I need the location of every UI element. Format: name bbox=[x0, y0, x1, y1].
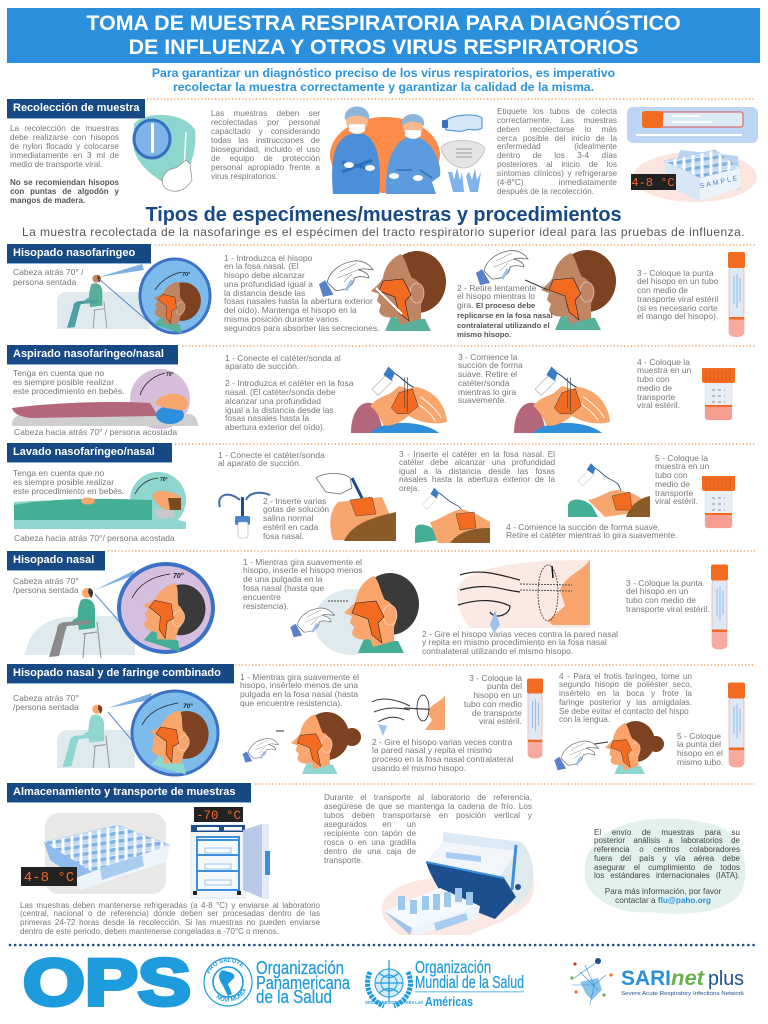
step 1: hisopo, inserte el hisopo menos bbox=[243, 565, 363, 575]
illustration: seated patient, nasal swab bbox=[25, 564, 213, 658]
subtitle: Para garantizar un diagnóstico preciso de los virus respiratorios, es imperativo bbox=[152, 66, 615, 80]
text: labelling tubes: Etiquete los tubos de colecta bbox=[497, 107, 617, 116]
illustration: throat swab bbox=[554, 721, 664, 774]
text: refrigeration: (central, nacional o de referencia) donde deben ser procesadas dentro de las bbox=[20, 909, 320, 918]
step 3: nasales hasta la abertura exterior de la bbox=[399, 475, 555, 484]
text: swab guidance: inmediatamente en 3 ml de bbox=[10, 150, 119, 160]
step 3: de transporte bbox=[472, 708, 522, 718]
step 5: medio de bbox=[655, 479, 690, 489]
text: labelling tubes: deben recolectarse lo más bbox=[497, 125, 617, 134]
illustration: refrigerated vials rack bbox=[21, 813, 170, 894]
step 3: del hisopo en un tubo bbox=[637, 276, 718, 286]
text: refrigeration: dentro de este periodo, deben mantenerse congeladas a -70°C o menos. bbox=[20, 927, 279, 936]
dotted dividers bbox=[108, 99, 755, 784]
step 1: 1 - Introduzca el hisopo bbox=[224, 252, 312, 262]
step 5: 5 - Coloque bbox=[677, 730, 721, 740]
note: infants: es siempre posible realizar bbox=[13, 376, 114, 386]
caption: position: Cabeza atrás 70° bbox=[13, 576, 79, 586]
step 2: usando el mismo hisopo. bbox=[372, 763, 466, 773]
caption: position: /persona sentada bbox=[13, 584, 79, 594]
illustration: cooler box with vials bbox=[382, 832, 534, 935]
step 2: estéril en cada bbox=[263, 522, 318, 532]
caption: position: /persona sentada bbox=[13, 702, 79, 712]
icon: sample box with temperature display: 4-8 °C bbox=[631, 176, 675, 190]
illustration: supine patient, wash bbox=[14, 472, 186, 529]
caption: position: Cabeza atrás 70° / bbox=[13, 267, 84, 277]
heading: storage and transport: Almacenamiento y transporte de muestras bbox=[13, 786, 236, 798]
step 5 bbox=[677, 730, 723, 767]
icon: viral transport tube bbox=[728, 252, 745, 337]
text: labelling tubes: cerca posible del inicio de la bbox=[497, 134, 617, 143]
heading: Lavado: Lavado nasofaríngeo/nasal bbox=[13, 446, 155, 458]
text: cold chain: transporte. bbox=[324, 856, 363, 865]
icon: specimen cup bbox=[702, 368, 735, 420]
step 4: segundo hisopo de poliéster seco, bbox=[559, 680, 692, 689]
step 2: el hisopo mientras lo bbox=[457, 291, 535, 301]
text: refrigeration: Las muestras deben mantenerse refrigeradas (a 4-8 °C) y enviarse al laboratorio bbox=[20, 900, 320, 910]
step 1: encuentre bbox=[243, 592, 281, 602]
step 2 bbox=[372, 736, 513, 773]
logo text: Organización Mundial de la Salud: Américas bbox=[425, 994, 473, 1009]
icon: labelled tube card bbox=[627, 107, 758, 143]
logo text: Organización Mundial de la Salud: Mundial de la Salud bbox=[415, 972, 524, 992]
subtitle bbox=[152, 66, 615, 94]
step 3: succión de forma bbox=[458, 360, 523, 370]
step 3: hisopo en un bbox=[473, 690, 522, 700]
note: infants bbox=[13, 368, 125, 396]
logo: WHO emblem bbox=[368, 960, 410, 1006]
text: trained personnel: todas las instrucciones de bbox=[211, 136, 320, 145]
callout: international shipment: El envío de muestras para su bbox=[594, 828, 740, 836]
step 5: viral estéril. bbox=[655, 496, 698, 506]
step 3: catéter/sonda bbox=[458, 378, 510, 388]
logo text: SARInet plus: net bbox=[671, 967, 705, 990]
step 3: mientras lo gira bbox=[458, 387, 516, 397]
icon: health workers with protective equipment bbox=[330, 106, 485, 194]
heading: Aspirado: Aspirado nasofaríngeo/nasal bbox=[13, 348, 164, 360]
step 3: transporte viral estéril. bbox=[626, 604, 710, 614]
logo text: Organización Mundial de la Salud: OFICINA REGIONAL PARA LAS bbox=[365, 1000, 423, 1005]
logo text: Organización Mundial de la Salud: Organización bbox=[415, 957, 491, 977]
illustration: refrigerated vials rack: 4-8 °C bbox=[24, 870, 74, 886]
text: swab guidance: debe realizarse con hisopos bbox=[10, 132, 119, 142]
step 4: faringe posterior y las amígdalas. bbox=[559, 698, 692, 707]
step 4: muestra en un bbox=[637, 365, 691, 375]
note: infants: este procedimiento en bebés. bbox=[13, 486, 125, 496]
step 3: 3 - Coloque la punta bbox=[626, 578, 703, 588]
logo: SARInet network graphic bbox=[570, 958, 613, 1005]
caption: position bbox=[13, 576, 79, 594]
note: infants: Tenga en cuenta que no bbox=[13, 468, 104, 478]
step 3: oreja. bbox=[399, 484, 419, 493]
illustration: supine patient, wash: 70° bbox=[160, 477, 168, 483]
illustration: rotating swab small bbox=[372, 695, 445, 736]
step 2: contralateral utilizando el bbox=[457, 321, 550, 330]
step 1: pulgada en la fosa nasal (hasta bbox=[240, 689, 358, 699]
heading: Recolección de muestra bbox=[7, 99, 145, 119]
step 2: y repita en mismo procedimiento en la fosa nasal bbox=[422, 637, 607, 647]
text: labelling tubes: después de la recolección. bbox=[497, 187, 594, 196]
logo text: SARInet plus: SARI bbox=[621, 967, 671, 990]
text: cold chain: recipiente con tapón de bbox=[324, 829, 416, 838]
step 5: 5 - Coloque la bbox=[655, 452, 708, 462]
step 3: transporte viral estéril bbox=[637, 294, 718, 304]
title banner bbox=[7, 8, 760, 63]
step 3: suave. Retire el bbox=[458, 369, 517, 379]
text: swab guidance: La recolección de muestras bbox=[10, 124, 119, 132]
title: DE INFLUENZA Y OTROS VIRUS RESPIRATORIOS bbox=[129, 35, 638, 59]
callout background blob bbox=[585, 819, 745, 914]
caption: position bbox=[13, 692, 79, 712]
text: swab guidance: con puntas de algodón y bbox=[10, 186, 119, 196]
illustration: nasal swab, profile bbox=[290, 573, 419, 655]
heading: Hisopado nasal bbox=[7, 551, 105, 571]
heading: Lavado bbox=[7, 443, 172, 463]
illustration: seated patient, nasopharyngeal swab: 70° bbox=[182, 272, 190, 278]
step 4: con la lengua. bbox=[559, 715, 610, 724]
step 1: 1 - Mientras gira suavemente el bbox=[243, 556, 362, 566]
step 4: 4 - Coloque la bbox=[637, 356, 690, 366]
icon: sample box with temperature display: SAMPLE bbox=[699, 175, 740, 190]
text: trained personnel: recolectadas por personal bbox=[211, 118, 320, 127]
text: cold chain bbox=[324, 793, 532, 865]
logo: PAHO emblem: PRO SALUTE bbox=[206, 958, 244, 974]
callout: international shipment: posterior análisis a laboratorios de bbox=[594, 836, 740, 845]
note: infants bbox=[13, 468, 125, 496]
text: labelling tubes: dentro de los 3-4 días bbox=[497, 151, 617, 160]
text: trained personnel: capacitado y considerando bbox=[211, 127, 320, 136]
step 3: tubo con medio de bbox=[626, 595, 696, 605]
text: swab guidance: mangos de madera. bbox=[10, 196, 85, 204]
step 4 bbox=[637, 356, 691, 410]
step 5: hisopo en el bbox=[677, 748, 723, 758]
text: swab guidance bbox=[10, 124, 119, 204]
logo text: SARInet plus: plus bbox=[708, 968, 744, 990]
step 5 bbox=[655, 452, 709, 506]
callout: international shipment: los estándares internacionales (IATA). bbox=[594, 871, 740, 880]
step 1: 1 - Conecte el catéter/sonda bbox=[218, 450, 325, 460]
text: trained personnel: de equipo de protección bbox=[211, 154, 320, 163]
text: labelling tubes: (4-8°C) inmediatamente bbox=[497, 178, 617, 187]
text: labelling tubes: síntomas clínicos) y refrigerarse bbox=[497, 169, 617, 178]
logo text: Organización Panamericana de la Salud: Organización bbox=[256, 957, 344, 978]
step 2: gotas de solución bbox=[263, 504, 329, 514]
step 1: en la fosa nasal. (El bbox=[224, 261, 299, 271]
step 1: del oído). Mantenga el hisopo en la bbox=[224, 305, 357, 315]
step 3: viral estéril. bbox=[479, 716, 522, 726]
steps 1 and 2: aparato de succión. bbox=[225, 361, 299, 371]
note: infants: Tenga en cuenta que no bbox=[13, 368, 104, 378]
callout: international shipment: referencia o centros colaboradores bbox=[594, 845, 740, 854]
step 1 bbox=[240, 672, 359, 708]
step 3: 3 - Coloque la punta bbox=[637, 268, 714, 278]
text: labelling tubes: posteriores al inicio de los bbox=[497, 160, 617, 169]
step 2: fosa nasal. bbox=[263, 531, 304, 541]
text: swab guidance: No se recomiendan hisopos bbox=[10, 178, 119, 186]
step 4: Retire el catéter mientras lo gira suavemente. bbox=[506, 530, 678, 540]
step 5: transporte bbox=[655, 488, 693, 498]
logo: PAHO emblem bbox=[203, 957, 253, 1007]
step 5: la punta del bbox=[677, 739, 721, 749]
steps 1 and 2: abertura exterior del oído). bbox=[225, 422, 325, 432]
illustration: rotating swab in nostril bbox=[457, 559, 590, 633]
step 3: 3 - Inserte el catéter en la fosa nasal. El bbox=[399, 450, 555, 458]
text: cold chain: asegurados en un bbox=[324, 820, 416, 829]
icon: viral transport tube bbox=[711, 564, 728, 650]
title: TOMA DE MUESTRA RESPIRATORIA PARA DIAGNÓSTICO bbox=[86, 11, 681, 35]
step 1: misma posición durante varios bbox=[224, 314, 339, 324]
illustration: catheter in nasal passage, step 2 bbox=[351, 366, 447, 433]
steps 1 and 2: 2 - Introduzca el catéter en la fosa bbox=[225, 378, 354, 388]
text: trained personnel: personal apropiado frente a bbox=[211, 163, 320, 172]
step 3: catéter debe alcanzar una profundidad bbox=[399, 458, 555, 467]
illustration: freezer with -70 display bbox=[191, 807, 270, 899]
heading: Hisopado nasofaríngeo: Hisopado nasofaríngeo bbox=[13, 247, 135, 259]
illustration: freezer with -70 display: -70 °C bbox=[196, 809, 241, 823]
contact: Para más información, por favor bbox=[605, 886, 721, 896]
illustration: seated patient, combined swab bbox=[57, 691, 218, 778]
note: infants: es siempre posible realizar bbox=[13, 476, 114, 486]
intro sentence: La muestra recolectada de la nasofaringe es el espécimen del tracto respiratorio superior ideal para las pruebas de influenza. bbox=[22, 225, 745, 239]
illustration: seated patient, nasal swab: 70° bbox=[173, 572, 184, 580]
step 3: punta del bbox=[487, 681, 522, 691]
step 1: hisopo, insértelo menos de una bbox=[240, 680, 358, 690]
heading: Aspirado bbox=[7, 345, 178, 365]
text: refrigeration bbox=[20, 900, 320, 936]
step 3: (si es necesario corte bbox=[637, 302, 718, 312]
icon: specimen cup bbox=[702, 476, 735, 528]
step 3: 3 - Comience la bbox=[458, 352, 518, 362]
icon: swab in lens and glove bbox=[134, 115, 195, 191]
callout: international shipment: fuera del país y vía aérea debe bbox=[594, 854, 740, 863]
logo text: Organización Panamericana de la Salud bbox=[256, 957, 351, 1007]
title bbox=[86, 10, 681, 59]
step 2: 2 - Gire el hisopo varias veces contra bbox=[372, 736, 512, 746]
icon: sample box with temperature display bbox=[631, 150, 757, 202]
step 3: tubo con medio bbox=[464, 699, 522, 709]
callout: international shipment: asegurar el cumplimiento de todos bbox=[594, 863, 740, 872]
step 4: insértelo en la boca y frote la bbox=[559, 689, 692, 698]
icon: suction bottle bbox=[219, 493, 270, 538]
text: trained personnel bbox=[211, 108, 320, 181]
logo text: SARInet plus bbox=[621, 967, 744, 997]
logo text: Organización Panamericana de la Salud: de la Salud bbox=[256, 986, 332, 1007]
step 3 bbox=[637, 268, 718, 321]
step 4: tubo con bbox=[637, 374, 670, 384]
illustration: seated patient, combined swab: 70° bbox=[183, 702, 193, 710]
text: trained personnel: virus respiratorios. bbox=[211, 172, 278, 181]
step 2: gira. El proceso debe bbox=[457, 300, 535, 310]
steps 1 and 2: fosas nasales hasta la bbox=[225, 413, 309, 423]
heading: Recolección de muestra: Recolección de muestra bbox=[13, 102, 140, 114]
step 3 bbox=[458, 352, 523, 405]
step 2: replicarse en la fosa nasal bbox=[457, 311, 553, 320]
illustration: swab inserted, side profile bbox=[319, 251, 446, 331]
heading: combined swab: Hisopado nasal y de faringe combinado bbox=[13, 667, 221, 679]
step 5: mismo tubo. bbox=[677, 757, 723, 767]
step 4: 4 - Para el frotis faríngeo, tome un bbox=[559, 672, 692, 680]
heading: combined swab bbox=[7, 664, 234, 684]
illustration: swab withdrawn, side profile bbox=[476, 250, 616, 330]
step 4: transporte bbox=[637, 392, 675, 402]
contact bbox=[605, 886, 722, 904]
callout: international shipment bbox=[594, 828, 740, 880]
steps 1 and 2: igual a la distancia desde las bbox=[225, 405, 334, 415]
step 1 bbox=[224, 252, 379, 332]
text: swab guidance: medio de transporte viral. bbox=[10, 160, 102, 168]
illustration: supine patient, aspirate bbox=[12, 369, 198, 429]
text: cold chain: tubos deben transportarse en posición vertical y bbox=[324, 811, 532, 820]
illustration: supine patient, aspirate: 70° bbox=[166, 372, 174, 378]
step 2: 2 - Retire lentamente bbox=[457, 282, 536, 292]
heading: specimen types: Tipos de especímenes/muestras y procedimientos bbox=[145, 204, 622, 226]
step 3: 3 - Coloque la bbox=[469, 672, 522, 682]
logo: OPS: OPS bbox=[23, 945, 191, 1019]
step 1: fosa nasal (hasta que bbox=[243, 583, 324, 593]
text: cold chain: asegúrese de que se mantenga la cadena de frío. Los bbox=[324, 802, 532, 811]
step 1: fosas nasales hasta la abertura exterior bbox=[224, 296, 373, 306]
text: trained personnel: Las muestras deben ser bbox=[211, 108, 320, 118]
note: infants: este procedimiento en bebés. bbox=[13, 386, 125, 396]
illustration: catheter in nasal passage, step 3 bbox=[514, 366, 610, 433]
step 4 bbox=[506, 522, 678, 540]
step 1 bbox=[218, 450, 325, 468]
step 2: contralateral utilizando el mismo hisopo. bbox=[422, 646, 573, 656]
step 5: tubo con bbox=[655, 470, 688, 480]
illustration: catheter inserted, wash bbox=[415, 488, 490, 543]
text: labelling tubes: enfermedad (idealmente bbox=[497, 142, 617, 151]
steps 1 and 2: 1 - Conecte el catéter/sonda al bbox=[225, 352, 341, 362]
caption: position: Cabeza hacia atrás 70°/ persona acostada bbox=[14, 532, 175, 542]
text: cold chain: Durante el transporte al laboratorio de referencia, bbox=[324, 793, 532, 802]
step 4: 4 - Comience la succión de forma suave. bbox=[506, 522, 660, 532]
step 1: que encuentre resistencia). bbox=[240, 698, 343, 708]
step 1: resistencia). bbox=[243, 601, 289, 611]
text: cold chain: rosca o en una gradilla bbox=[324, 838, 416, 847]
text: labelling tubes bbox=[497, 107, 618, 196]
icon: viral transport tube bbox=[527, 678, 543, 758]
caption: position: persona sentada bbox=[13, 277, 76, 287]
illustration: seated patient, nasopharyngeal swab bbox=[57, 259, 210, 336]
step 2 bbox=[263, 496, 329, 541]
step 5: muestra en un bbox=[655, 461, 709, 471]
step 3 bbox=[399, 450, 556, 493]
step 3: igual a la distancia desde las fosas bbox=[399, 467, 555, 476]
text: swab guidance: de nylon flocado y colocarse bbox=[10, 142, 119, 150]
step 2: mismo hisopo. bbox=[457, 330, 511, 339]
steps 1 and 2: alcanzar una profundidad bbox=[225, 396, 321, 406]
step 2: la pared nasal y repita el mismo bbox=[372, 745, 492, 755]
subtitle: recolectar la muestra correctamente y garantizar la calidad de la misma. bbox=[173, 80, 594, 94]
icon: viral transport tube bbox=[728, 682, 745, 768]
logo text: Organización Mundial de la Salud bbox=[365, 957, 524, 1009]
illustration: suction, wash bbox=[568, 463, 650, 517]
step 3: el mango del hisopo). bbox=[637, 311, 718, 321]
step 3: suavemente. bbox=[458, 395, 507, 405]
heading: Hisopado nasal: Hisopado nasal bbox=[13, 554, 94, 566]
contact: contactar a flu@paho.org bbox=[615, 896, 711, 904]
text: refrigeration: primeras 24-72 horas desde la recolección. Si las muestras no pueden enviarse bbox=[20, 918, 320, 927]
step 2 bbox=[422, 628, 618, 656]
step 3 bbox=[464, 672, 522, 726]
step 1: segundos para absorber las secreciones. bbox=[224, 322, 379, 332]
logo text: Organización Panamericana de la Salud: Panamericana bbox=[256, 972, 351, 993]
step 2: proceso en la fosa nasal contralateral bbox=[372, 754, 513, 764]
caption: position bbox=[13, 267, 84, 287]
step 1: la distancia desde las bbox=[224, 288, 305, 298]
step 4: medio de bbox=[637, 383, 672, 393]
step 4 bbox=[559, 672, 692, 724]
step 4: Se debe evitar el contacto del hispo bbox=[559, 707, 689, 716]
text: cold chain: dentro de una caja de bbox=[324, 847, 416, 856]
step 2 bbox=[457, 282, 553, 339]
step 1: hisopo debe alcanzar bbox=[224, 270, 305, 280]
illustration: nasal swab with brown hair bbox=[243, 712, 361, 774]
step 1 bbox=[243, 556, 363, 611]
steps 1 and 2 bbox=[225, 352, 354, 432]
step 4: viral estéril. bbox=[637, 400, 680, 410]
step 2: salina normal bbox=[263, 513, 314, 523]
step 2: 2 - Gire el hisopo varias veces contra la pared nasal bbox=[422, 628, 618, 638]
step 1: al aparato de succión. bbox=[218, 458, 301, 468]
caption: position: Cabeza hacia atrás 70° / persona acostada bbox=[14, 426, 177, 436]
logo text: SARInet plus: Severe Acute Respiratory Infections Network bbox=[621, 991, 744, 997]
step 3: del hisopo en un bbox=[626, 586, 688, 596]
text: labelling tubes: correctamente. Las muestras bbox=[497, 116, 617, 125]
heading: Hisopado nasofaríngeo bbox=[7, 244, 151, 264]
step 1: de una pulgada en la bbox=[243, 574, 322, 584]
caption: position: Cabeza atrás 70° bbox=[13, 692, 79, 702]
steps 1 and 2: nasal. (El catéter/sonda debe bbox=[225, 387, 336, 397]
heading: storage and transport bbox=[7, 783, 251, 803]
text: trained personnel: bioseguridad, incluido el uso bbox=[211, 145, 320, 154]
logo: PAHO emblem: NOVI MUNDI bbox=[216, 988, 246, 1002]
step 3 bbox=[626, 578, 710, 614]
step 1: 1 - Mientras gira suavemente el bbox=[240, 672, 359, 682]
step 2: 2 - Inserte varias bbox=[263, 496, 326, 506]
step 3: con medio de bbox=[637, 285, 688, 295]
step 1: una profundidad igual a bbox=[224, 279, 313, 289]
illustration: saline drops in nose bbox=[316, 474, 396, 541]
